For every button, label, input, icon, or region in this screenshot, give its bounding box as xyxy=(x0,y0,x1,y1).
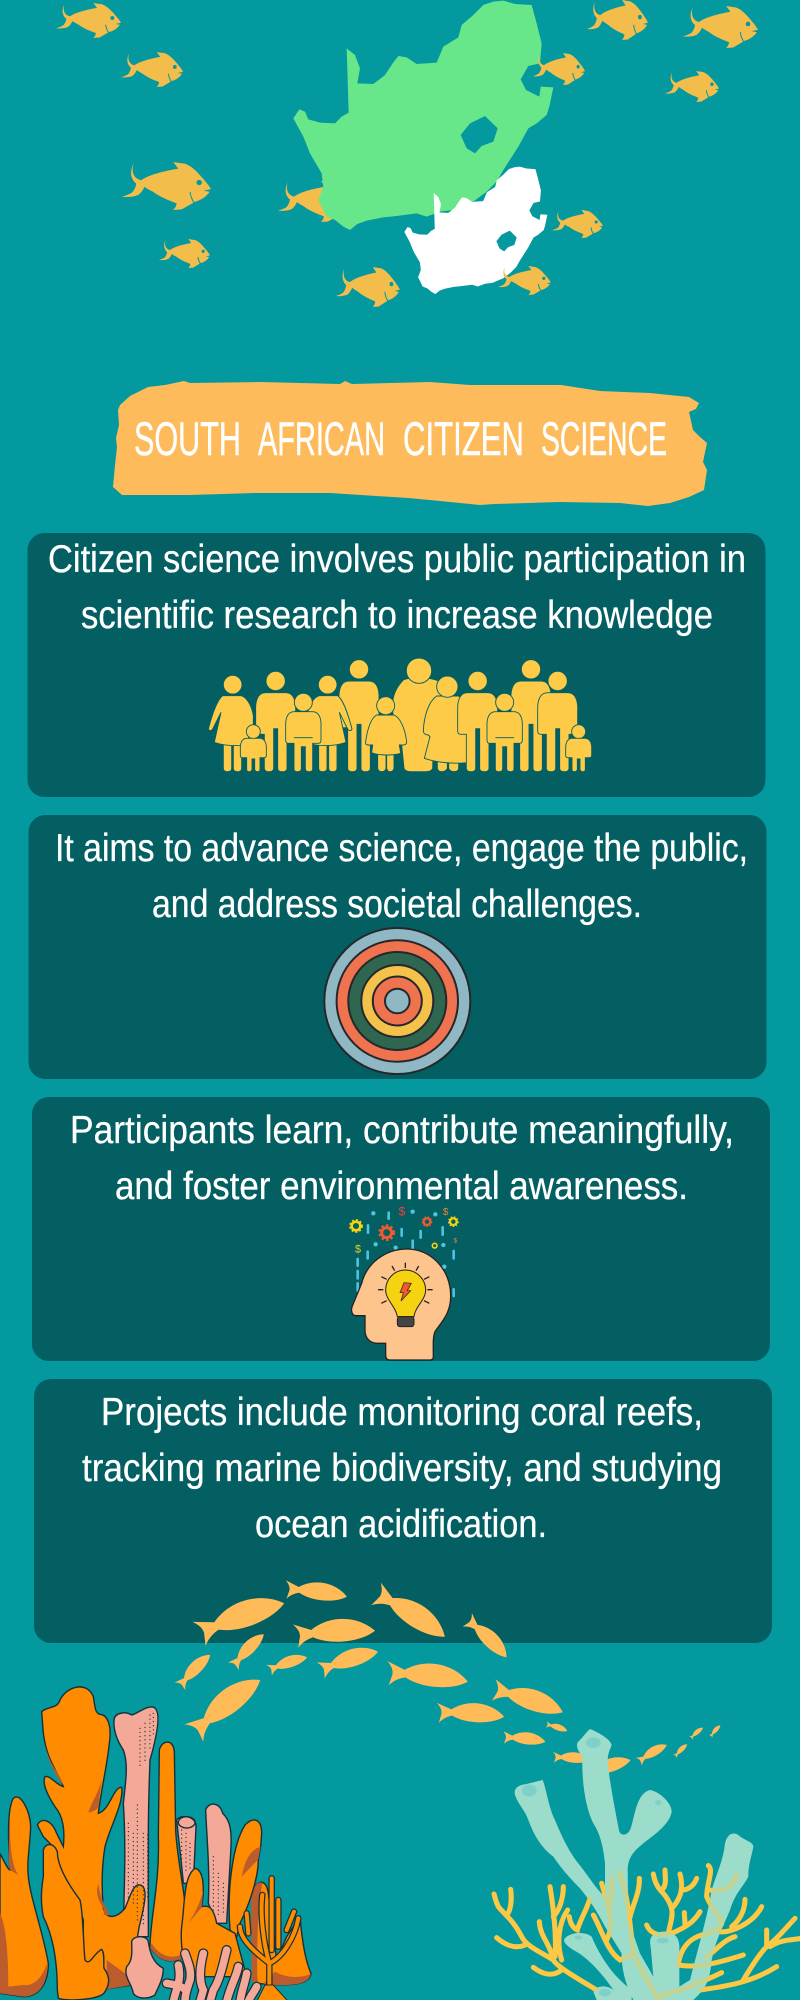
panel text: ocean acidification. xyxy=(255,1503,547,1546)
panel text: Participants learn, contribute meaningfully, xyxy=(70,1109,734,1152)
title text: CITIZEN xyxy=(403,412,524,465)
pink branching coral xyxy=(167,1950,257,2000)
map: white South Africa xyxy=(404,167,547,294)
panel: what citizen science is xyxy=(28,533,766,797)
icon: head with light bulb: $ xyxy=(355,1244,361,1256)
panel text xyxy=(82,1391,722,1546)
right coral: mint and yellow xyxy=(494,1729,800,2000)
title banner xyxy=(113,381,707,506)
panel text: Projects include monitoring coral reefs, xyxy=(101,1391,703,1434)
icon: head with light bulb xyxy=(350,1204,458,1360)
brush stroke shape xyxy=(113,381,707,506)
icon: head with light bulb: $ xyxy=(443,1207,449,1218)
icon: group of people xyxy=(208,658,592,772)
panel: aims of citizen science xyxy=(28,815,766,1079)
map: green South Africa xyxy=(293,1,553,230)
panel text: and address societal challenges. xyxy=(152,883,642,926)
panel text xyxy=(55,827,748,926)
fish partly behind map xyxy=(278,181,353,222)
fish school arc xyxy=(173,1578,722,1782)
title text: SCIENCE xyxy=(541,412,667,465)
orange hand coral xyxy=(240,1878,298,2000)
panel text xyxy=(48,538,746,637)
school of gold fish xyxy=(56,0,758,307)
panel text: tracking marine biodiversity, and studying xyxy=(82,1447,722,1490)
small front corals xyxy=(167,1878,298,2000)
icon: head with light bulb: $ xyxy=(453,1238,457,1245)
panel: participant benefits xyxy=(32,1097,770,1361)
title text: SOUTH xyxy=(134,412,241,465)
panel text: scientific research to increase knowledge xyxy=(81,594,713,637)
left coral: orange and pink xyxy=(0,1687,311,2000)
title text: AFRICAN xyxy=(258,412,385,465)
title text xyxy=(134,412,667,465)
panel text: and foster environmental awareness. xyxy=(115,1165,688,1208)
panel text xyxy=(70,1109,734,1208)
panel: example projects xyxy=(34,1379,772,1643)
icon: target rings xyxy=(324,928,470,1074)
icon: head with light bulb: $ xyxy=(399,1204,406,1218)
